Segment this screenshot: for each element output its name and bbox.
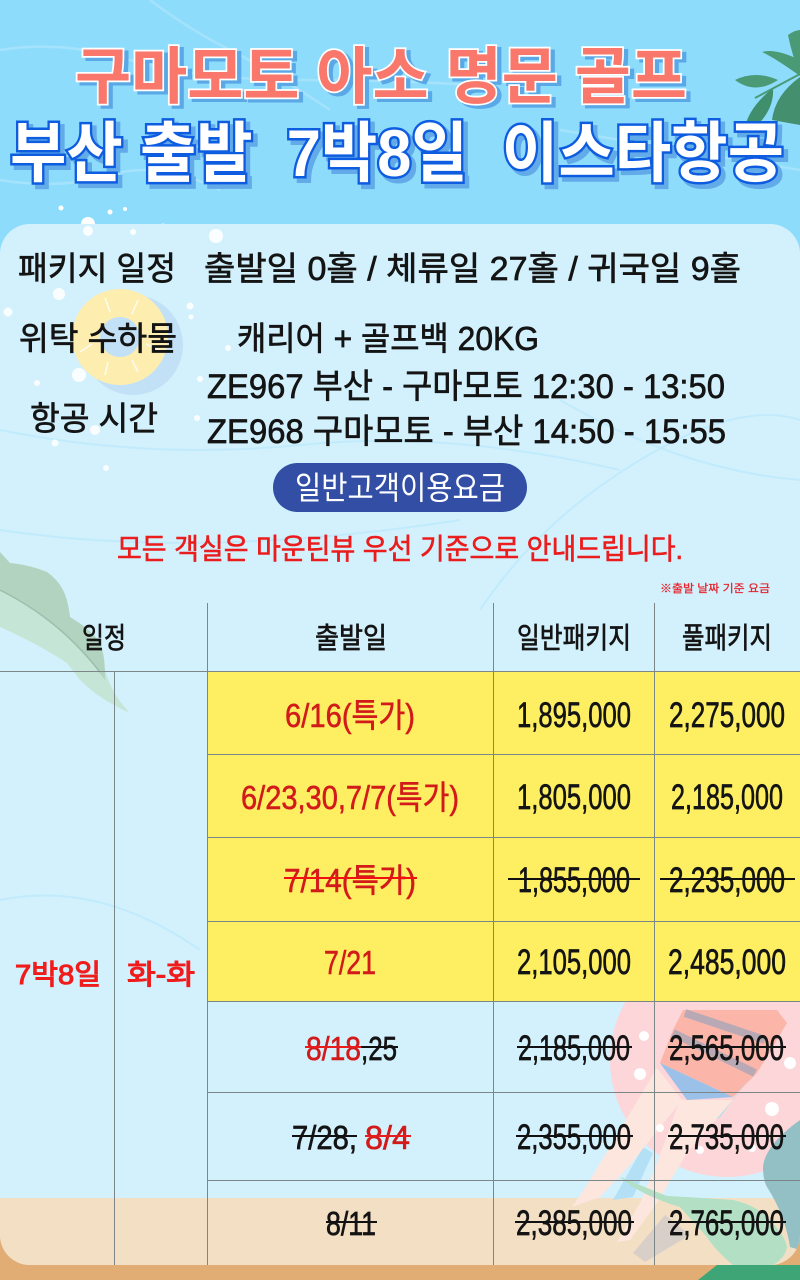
table row 4: [324, 943, 786, 982]
table row 3 (struck through): [284, 861, 795, 900]
table row 7 (struck through): 8/11: [326, 1205, 376, 1242]
footnote: ※출발 날짜 기준 요금: [660, 582, 770, 595]
table row 5 (struck through): ,25: [361, 1030, 397, 1067]
table header: 풀패키지: [682, 623, 772, 655]
info block: checked baggage: 캐리어 + 골프백 20KG: [237, 320, 539, 357]
decoration: white bubbles: [4, 226, 231, 471]
table row 6 (struck through): 7/28,: [292, 1119, 357, 1156]
table header: 일반패키지: [517, 623, 631, 655]
info block: package schedule: 출발일 0홀 / 체류일 27홀 / 귀국일 9홀: [204, 250, 741, 287]
table row 3 (struck through): 7/14(특가): [284, 862, 416, 899]
decoration: palm leaves top right: [735, 30, 800, 137]
info block: checked baggage: 위탁 수하물: [19, 320, 177, 357]
decoration: bottom right leaf outside panel: [698, 1265, 800, 1280]
table row 7 (struck through): 2,385,000: [516, 1204, 632, 1243]
table row 5 (struck through): 2,185,000: [518, 1029, 630, 1068]
title line 1: 구마모토 아소 명문 골프: [79, 46, 691, 115]
table row 1: 1,895,000: [517, 696, 631, 735]
decoration: translucent leaves bottom right: [620, 1120, 800, 1265]
info block: checked baggage: [19, 320, 539, 357]
table row 2: 6/23,30,7/7(특가): [241, 779, 459, 816]
table: grid lines: [0, 603, 800, 1265]
table: itinerary labels: 화-화: [127, 959, 195, 990]
table: yellow highlighted rows: [207, 671, 800, 1001]
table row 5 (struck through): 8/18: [306, 1030, 361, 1067]
table header: [82, 622, 772, 655]
table header: 출발일: [315, 622, 387, 655]
badge: general customer fare: [273, 463, 527, 512]
table row 1: [285, 696, 785, 735]
table row 7 (struck through): [326, 1204, 786, 1243]
info block: package schedule: 패키지 일정: [18, 250, 176, 287]
decoration: swim ring yellow: [80, 295, 183, 395]
decoration: pink swim ring with swimmer: [572, 1002, 800, 1262]
info block: flight times: [30, 368, 726, 451]
table row 1: 6/16(특가): [285, 697, 415, 734]
table: itinerary labels: 7박8일: [15, 959, 101, 990]
info block: flight times: ZE967 부산 - 구마모토 12:30 - 13:50: [207, 368, 725, 406]
info block: flight times: 항공 시간: [30, 400, 158, 437]
notice: mountain view rooms: 모든 객실은 마운틴뷰 우선 기준으로 안내드립니다.: [117, 533, 683, 566]
title line 1: 구마모토 아소 명문 골프: [75, 43, 687, 112]
table row 3 (struck through): 1,855,000: [518, 861, 630, 900]
table row 6 (struck through): 2,355,000: [517, 1118, 631, 1157]
table row 6 (struck through): [292, 1118, 786, 1157]
table row 4: 7/21: [324, 944, 376, 981]
table row 2: 1,805,000: [517, 778, 631, 817]
table row 5 (struck through): [305, 1029, 786, 1068]
table: itinerary labels: [15, 959, 195, 990]
table row 2: [241, 778, 783, 817]
info block: flight times: ZE968 구마모토 - 부산 14:50 - 15:55: [207, 413, 726, 451]
table header: 일정: [82, 623, 126, 655]
table row 4: 2,105,000: [517, 943, 631, 982]
decoration: sand area: [0, 1198, 800, 1265]
table row 6 (struck through): 8/4: [365, 1119, 410, 1156]
badge: general customer fare: 일반고객이용요금: [295, 470, 505, 506]
sand strip: [0, 1198, 800, 1280]
decoration: left green leaf: [0, 552, 130, 713]
